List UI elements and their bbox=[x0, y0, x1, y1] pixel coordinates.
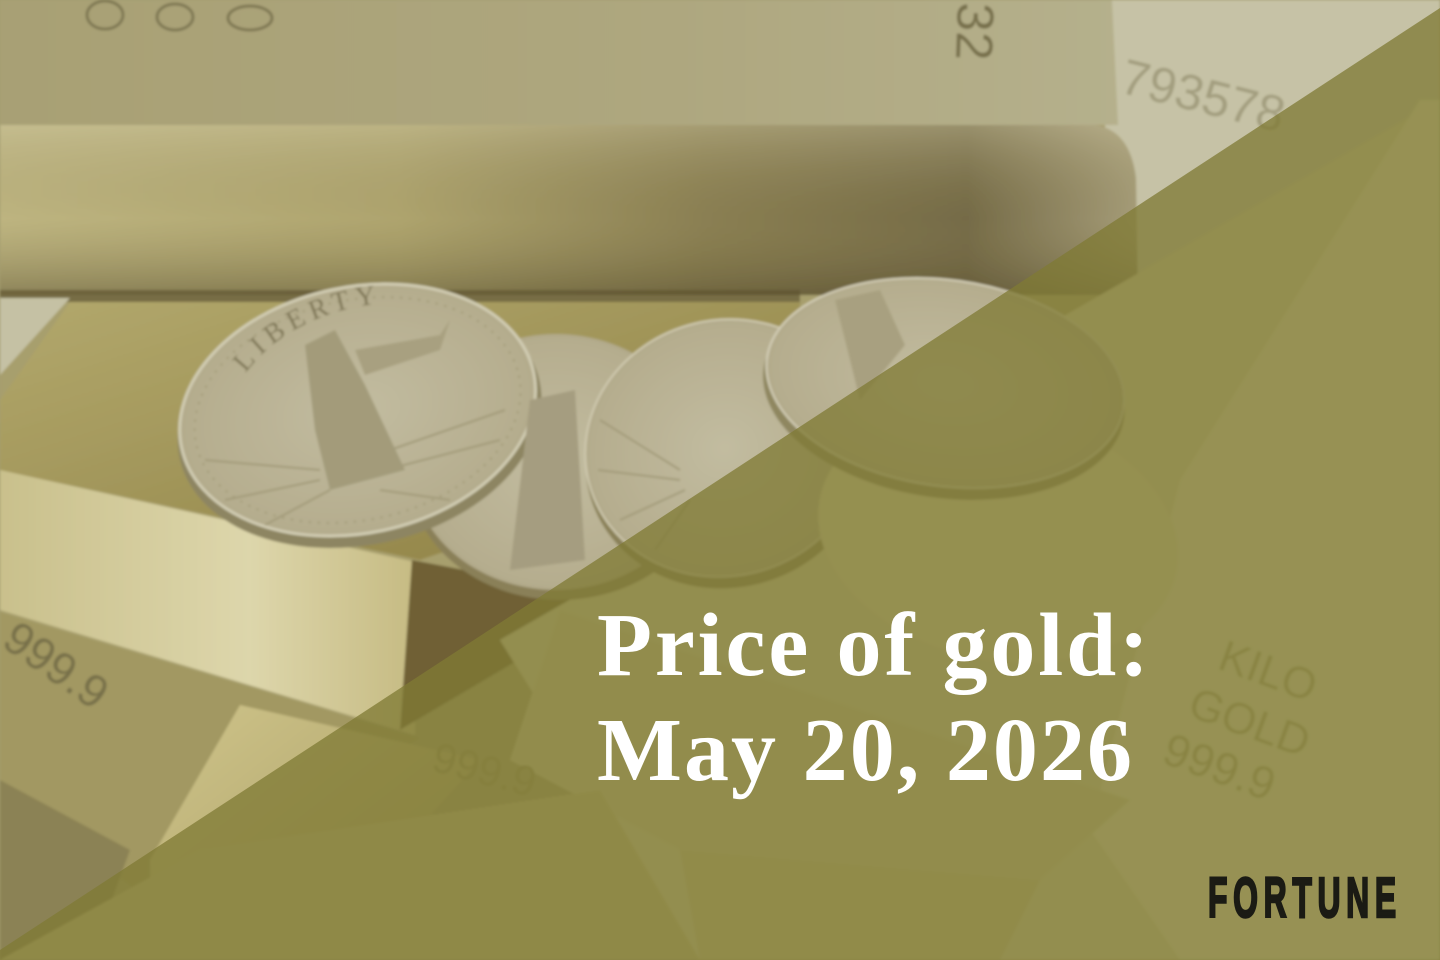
coin 2 bbox=[408, 340, 712, 600]
far right bar, seen through overlay bbox=[1090, 100, 1440, 960]
left gold bar: top face bbox=[0, 302, 800, 560]
top gold bar: upper face bbox=[0, 0, 1118, 125]
engraved number on top bar: 32 bbox=[944, 2, 1004, 61]
sun rays on coin 1 bbox=[205, 410, 505, 525]
left gold bar: front face bbox=[0, 470, 415, 735]
headline bbox=[597, 596, 1149, 800]
background photo: gold bars and coins: 999.9 bbox=[428, 733, 541, 806]
top gold bar: front shading bbox=[0, 125, 1138, 295]
central lower bar, seen through overlay bbox=[510, 610, 1130, 880]
background photo: gold bars and coins: 999.9 bbox=[1157, 723, 1283, 811]
bottom-left bar bbox=[150, 705, 480, 960]
left edge sliver bbox=[0, 298, 70, 375]
serial number engraved on back bar: 793578 bbox=[1115, 48, 1291, 143]
sun rays on coin 3 bbox=[598, 420, 690, 550]
dark gap between bars bbox=[400, 560, 620, 730]
headline line 2: May 20, 2026 bbox=[597, 701, 1132, 800]
LIBERTY inscription on coin 1: LIBERTY bbox=[232, 285, 373, 372]
liberty figure on coin 1 bbox=[305, 330, 405, 490]
Fortune logo: FORTUNE bbox=[1208, 865, 1396, 929]
top gold bar: front face bbox=[0, 125, 1138, 295]
liberty figure on coin 4 bbox=[835, 290, 905, 400]
bottom bar, seen through overlay bbox=[0, 790, 700, 960]
engraving on lower bars: KILO bbox=[1213, 631, 1324, 712]
coin 5, under overlay bbox=[794, 375, 1202, 695]
coin 1 bbox=[152, 251, 566, 580]
lower-left bar bbox=[0, 612, 420, 900]
coin 3 bbox=[556, 290, 896, 618]
liberty figure on coin 2 bbox=[510, 390, 585, 570]
lower right bar, seen through overlay bbox=[500, 100, 1440, 960]
engraved marks on top bar bbox=[87, 1, 272, 30]
headline line 1: Price of gold: bbox=[597, 596, 1149, 695]
coin 4 bbox=[749, 256, 1140, 522]
back bar at right bbox=[1105, 0, 1440, 400]
background photo: gold bars and coins: GOLD bbox=[1183, 678, 1317, 767]
shadow beneath top bar bbox=[0, 290, 800, 302]
